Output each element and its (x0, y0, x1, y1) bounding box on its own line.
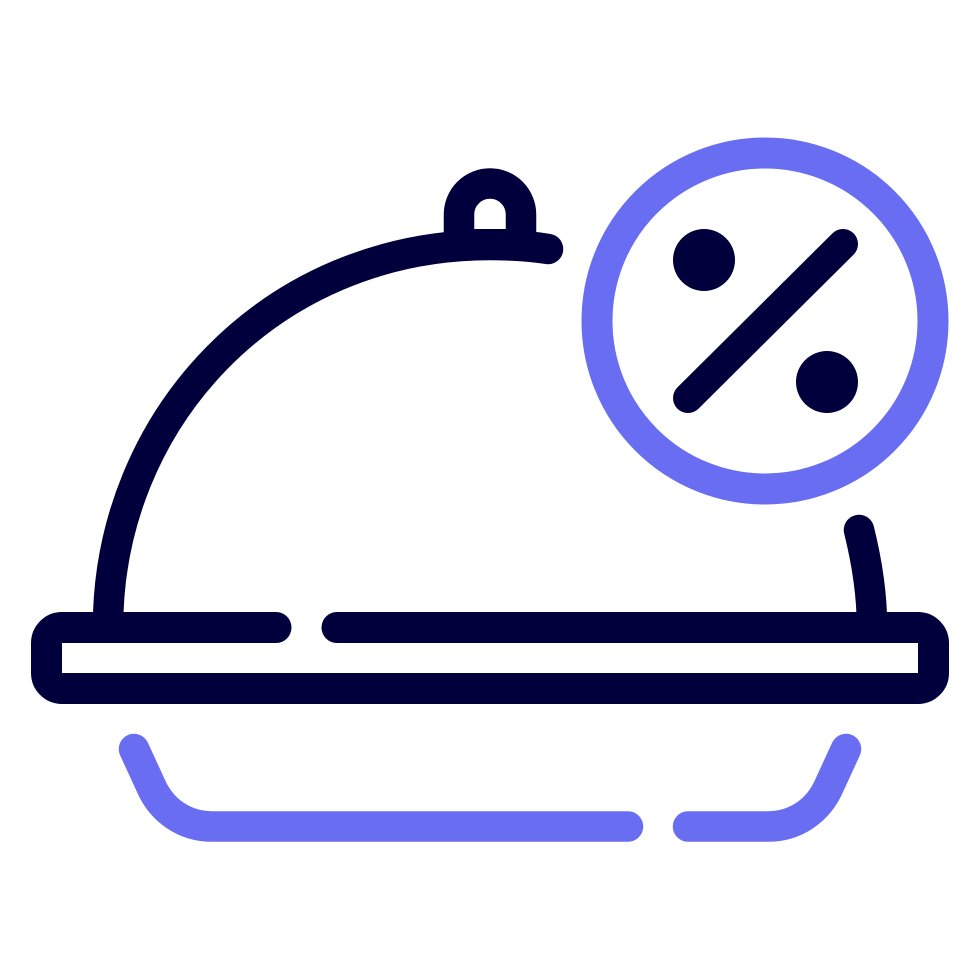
basket base (134, 749, 846, 826)
dome of cloche (108, 245, 872, 627)
discount badge (597, 153, 933, 489)
tray (46, 628, 934, 688)
percent sign (673, 229, 858, 413)
cloche handle (459, 183, 521, 240)
